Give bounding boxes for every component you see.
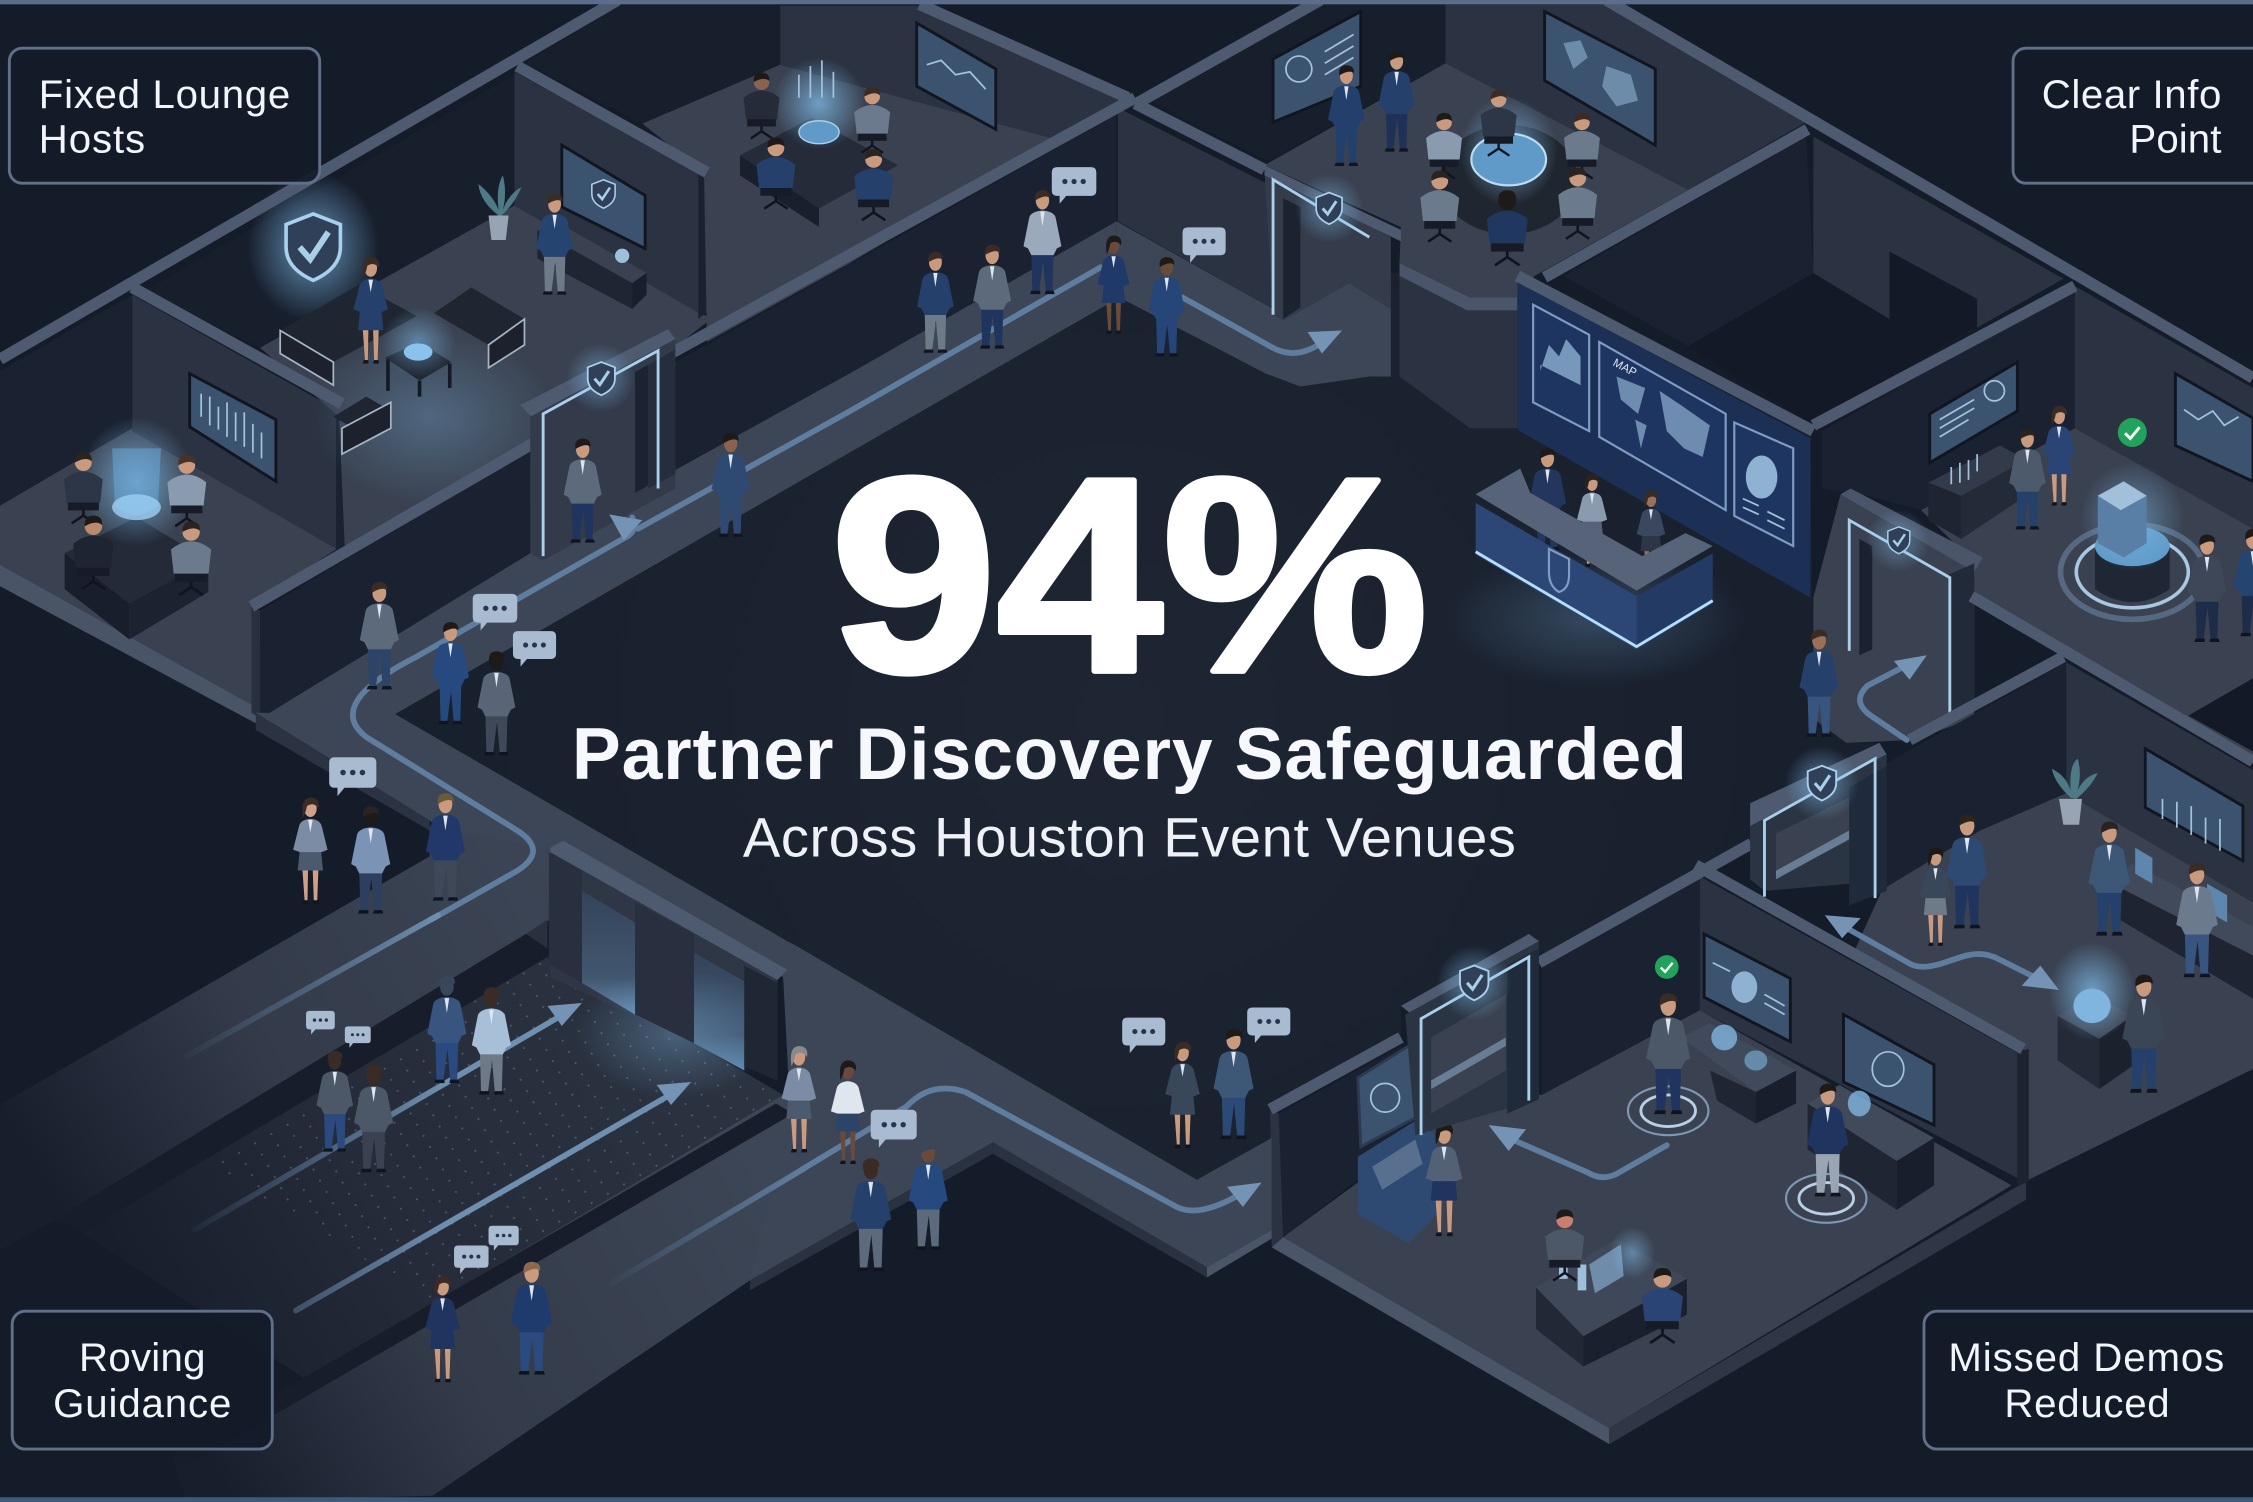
wall screen xyxy=(1843,1014,1934,1125)
icon: door shield xyxy=(566,343,635,412)
panel: upper conference room xyxy=(526,6,1128,342)
arrow: route to upper gate xyxy=(1183,297,1342,353)
meeting table with hologram xyxy=(65,417,208,639)
wall screen: line chart xyxy=(917,23,996,129)
kiosk xyxy=(1358,1042,1437,1243)
label: clear info point xyxy=(2013,48,2253,183)
reception desk xyxy=(1476,468,1713,649)
wall screen: bar chart xyxy=(2145,749,2243,861)
wall screen: line chart xyxy=(2175,374,2253,481)
label: roving guidance xyxy=(12,1311,272,1449)
icon: green check xyxy=(2118,418,2147,447)
elevator block xyxy=(549,841,787,1099)
label: fixed lounge hosts: Hosts xyxy=(39,116,145,161)
panel: left lower S-corridor floor xyxy=(0,713,805,1250)
people: showcase visitors xyxy=(2009,406,2253,642)
floor target rings xyxy=(1628,1086,1866,1223)
label: roving guidance: Guidance xyxy=(53,1381,231,1426)
label: missed demos reduced xyxy=(1924,1311,2253,1449)
label: clear info point: Point xyxy=(2129,116,2221,161)
people: upper corridor xyxy=(917,190,1185,356)
arrow: entry path xyxy=(1860,655,1927,740)
people: seated meeting xyxy=(64,452,211,595)
label: fixed lounge hosts: Fixed Lounge xyxy=(39,72,290,117)
panel: lounge xyxy=(144,72,711,549)
hologram table xyxy=(740,57,898,227)
icon: door shield xyxy=(1295,174,1364,243)
arrow: room path xyxy=(1489,1125,1667,1177)
plant xyxy=(478,175,522,240)
console xyxy=(1928,445,2026,539)
plant xyxy=(2052,759,2098,825)
security gate: lab room xyxy=(1750,743,1887,905)
wall screen: bar chart xyxy=(190,374,276,481)
double arrow xyxy=(1825,915,2059,990)
panel: empty side room xyxy=(1563,137,2063,424)
label: missed demos reduced: Missed Demos xyxy=(1948,1335,2224,1380)
people: lab visitors xyxy=(1920,814,2218,1093)
security gate: upper corridor xyxy=(1264,165,1401,320)
panel: reception wall and desk xyxy=(1400,263,1810,687)
label: fixed lounge hosts xyxy=(9,48,320,183)
wall tops xyxy=(0,0,2253,1109)
desk glow xyxy=(1444,549,1746,687)
people: lower corridor xyxy=(782,1029,1254,1271)
wall screen xyxy=(1704,934,1790,1042)
security gate: demo room xyxy=(1401,934,1539,1135)
demo counter xyxy=(2112,848,2253,999)
wall screen: donut dashboard xyxy=(1273,12,1361,122)
people: receptionists xyxy=(1529,448,1665,579)
arrow: route to lounge gate xyxy=(187,514,642,1056)
orb podium xyxy=(2049,943,2135,1089)
panel: executive meeting room xyxy=(1149,4,1806,297)
people: executive meeting xyxy=(1328,51,1600,265)
security gate: lounge xyxy=(520,329,675,560)
reception screen: world map: MAP xyxy=(1611,357,1639,379)
icon: door shield xyxy=(1866,509,1930,572)
panel: lower corridor floor xyxy=(550,848,1272,1290)
pedestal with safe xyxy=(2060,463,2204,619)
lounge sofas and table xyxy=(280,285,524,454)
arrow: hall route one xyxy=(194,1003,582,1230)
panel: bottom right demo room xyxy=(1270,877,2029,1444)
panel: entry floor to showcase xyxy=(1800,489,1983,743)
round hologram table xyxy=(1440,96,1578,234)
panel: lower right lab room xyxy=(1825,662,2253,1181)
label: missed demos reduced: Reduced xyxy=(2004,1381,2170,1426)
central atrium void xyxy=(395,273,1879,1180)
office desk xyxy=(1536,1227,1687,1366)
arrow: hall route two xyxy=(296,1082,691,1310)
panel: central hall carpet xyxy=(52,920,993,1502)
panel: upper corridor floor xyxy=(251,108,1391,747)
icon: door shield xyxy=(1785,746,1859,820)
people: lounge gate xyxy=(564,433,750,543)
speech bubbles xyxy=(306,167,1290,1274)
bottom edge bar xyxy=(0,1497,2253,1502)
reception screen: world map xyxy=(1599,342,1726,510)
people: lounge hosts xyxy=(353,194,573,364)
wall screen: shield xyxy=(562,145,645,249)
people: demo room xyxy=(1426,993,1848,1343)
label: roving guidance: Roving xyxy=(79,1335,205,1380)
arrow: lower corridor route xyxy=(612,1089,1262,1283)
panel: left meeting room xyxy=(0,295,345,726)
heading: Partner Discovery Safeguarded xyxy=(572,713,1687,795)
demo counter left xyxy=(1681,1023,1796,1124)
headline stat: 94% xyxy=(831,420,1428,730)
icon: large glowing shield xyxy=(247,172,379,322)
icons: green checks xyxy=(1432,955,1679,1114)
top edge bar xyxy=(0,0,2253,4)
demo counter right xyxy=(1808,1085,1934,1210)
label: clear info point: Clear Info xyxy=(2042,72,2221,117)
sideboard xyxy=(537,220,647,309)
reception screen: pie chart xyxy=(1734,422,1793,546)
panel: upper right showcase room xyxy=(1822,286,2253,764)
person: walker xyxy=(1800,629,1839,737)
subheading: Across Houston Event Venues xyxy=(743,805,1516,868)
arrow: route along upper corridor xyxy=(638,267,1101,529)
wall screen: left xyxy=(1930,362,2017,463)
icon: door shield xyxy=(1437,945,1512,1020)
reception screen: area chart xyxy=(1533,305,1589,431)
people: hall xyxy=(316,976,552,1382)
people: left path xyxy=(293,582,515,914)
wall screen: world map xyxy=(1545,12,1655,145)
people: seated around table xyxy=(744,73,893,220)
